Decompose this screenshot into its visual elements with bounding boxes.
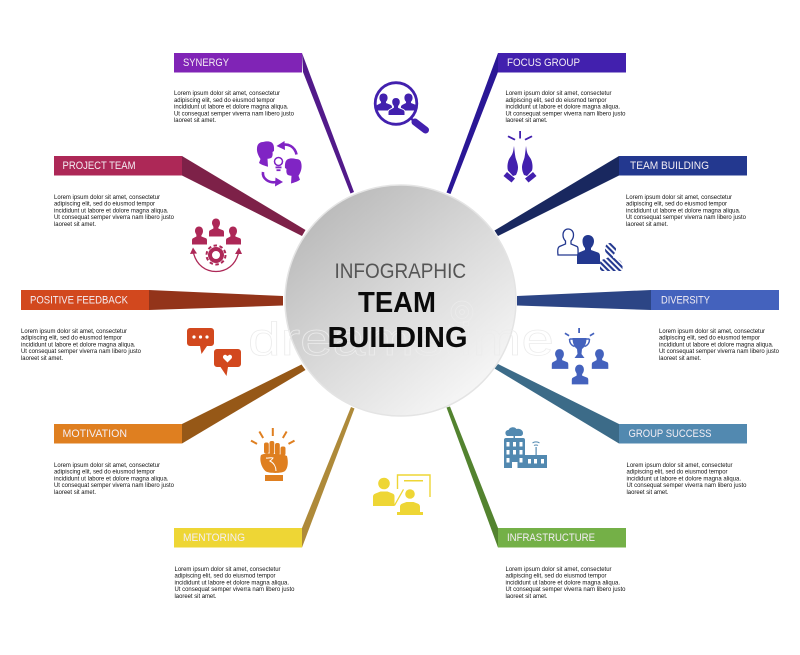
icon: mentor at board	[373, 475, 430, 515]
title: BUILDING	[328, 322, 468, 354]
icon: two heads with idea bulb	[257, 141, 302, 186]
description: Lorem ipsum dolor sit amet, consectetur	[506, 90, 612, 97]
description: Lorem ipsum dolor sit amet, consectetur	[174, 90, 281, 97]
icon: raised fist	[250, 428, 295, 481]
description: laoreet sit amet.	[174, 117, 216, 124]
description: Lorem ipsum dolor sit amet, consectetur	[54, 462, 161, 469]
description: laoreet sit amet.	[54, 489, 96, 496]
description: Ut consequat semper viverra nam libero justo	[506, 110, 626, 117]
description	[21, 328, 141, 362]
label bar	[174, 53, 302, 72]
description: Ut consequat semper viverra nam libero justo	[626, 214, 746, 221]
description: adipiscing elit, sed do eiusmod tempor	[54, 469, 156, 476]
label bar	[54, 156, 182, 176]
description: adipiscing elit, sed do eiusmod tempor	[626, 201, 728, 208]
label bar	[498, 528, 626, 548]
connector	[517, 290, 651, 310]
description: incididunt ut labore et dolore magna aliqua.	[626, 207, 741, 214]
label bar	[619, 424, 747, 444]
connector	[494, 364, 619, 444]
description	[506, 90, 626, 124]
description: Ut consequat semper viverra nam libero justo	[174, 586, 295, 593]
description: laoreet sit amet.	[626, 221, 668, 228]
description	[174, 90, 294, 124]
description: adipiscing elit, sed do eiusmod tempor	[626, 469, 728, 476]
description: Lorem ipsum dolor sit amet, consectetur	[659, 328, 766, 335]
label bar	[21, 290, 149, 310]
label text: MENTORING	[183, 532, 245, 544]
icon: trophy with team	[552, 328, 608, 384]
panel: infrastructure	[446, 406, 626, 600]
connector	[446, 406, 498, 548]
description	[54, 194, 174, 228]
description	[506, 566, 626, 600]
label text: INFRASTRUCTURE	[507, 532, 595, 544]
description: Ut consequat semper viverra nam libero justo	[54, 482, 174, 489]
label bar	[619, 156, 747, 176]
description: incididunt ut labore et dolore magna aliqua.	[174, 104, 289, 110]
label text: MOTIVATION	[62, 428, 127, 440]
label text: GROUP SUCCESS	[628, 428, 712, 440]
label text: FOCUS GROUP	[507, 57, 580, 69]
description: Lorem ipsum dolor sit amet, consectetur	[626, 194, 733, 201]
connector	[446, 53, 498, 194]
panel: project team	[54, 156, 306, 236]
description: Lorem ipsum dolor sit amet, consectetur	[506, 566, 612, 573]
panel: team building	[494, 156, 747, 236]
icon: praying hands	[504, 131, 536, 182]
description: Lorem ipsum dolor sit amet, consectetur	[626, 462, 733, 469]
label text: SYNERGY	[183, 57, 230, 69]
central disc	[285, 185, 516, 416]
description: Lorem ipsum dolor sit amet, consectetur	[21, 328, 128, 335]
icon: team partners	[558, 229, 622, 271]
watermark: dreamstime	[248, 313, 554, 365]
connector	[302, 407, 354, 548]
description: Lorem ipsum dolor sit amet, consectetur	[174, 566, 281, 573]
description: laoreet sit amet.	[626, 489, 669, 496]
panel: diversity	[517, 290, 779, 362]
description: Lorem ipsum dolor sit amet, consectetur	[54, 194, 161, 201]
label text: TEAM BUILDING	[630, 160, 709, 172]
description: adipiscing elit, sed do eiusmod tempor	[174, 573, 276, 580]
description: Ut consequat semper viverra nam libero justo	[659, 348, 779, 355]
panel: focus group	[446, 53, 626, 194]
panel: motivation	[54, 364, 306, 496]
title	[328, 260, 468, 354]
description: incididunt ut labore et dolore magna aliqua.	[21, 341, 136, 348]
description	[54, 462, 174, 496]
title: INFOGRAPHIC	[334, 260, 466, 283]
panel: positive feedback	[21, 290, 283, 362]
label bar	[54, 424, 182, 444]
description: incididunt ut labore et dolore magna aliqua.	[506, 579, 620, 586]
description: incididunt ut labore et dolore magna aliqua.	[54, 207, 169, 214]
description: Ut consequat semper viverra nam libero justo	[626, 482, 747, 489]
description	[659, 328, 779, 362]
description: Ut consequat semper viverra nam libero justo	[174, 110, 294, 117]
description	[626, 462, 747, 496]
description: adipiscing elit, sed do eiusmod tempor	[174, 97, 276, 104]
label bar	[498, 53, 626, 72]
watermark	[248, 301, 554, 365]
description: incididunt ut labore et dolore magna aliqua.	[506, 104, 620, 110]
label text: DIVERSITY	[661, 294, 711, 306]
description: incididunt ut labore et dolore magna aliqua.	[54, 475, 169, 482]
title: TEAM	[358, 287, 436, 319]
description: laoreet sit amet.	[21, 355, 63, 362]
connector	[494, 156, 619, 236]
description: adipiscing elit, sed do eiusmod tempor	[506, 573, 607, 580]
label bar	[174, 528, 302, 548]
description: adipiscing elit, sed do eiusmod tempor	[506, 97, 607, 104]
panel: group success	[494, 364, 747, 496]
panel: synergy	[174, 53, 354, 194]
label text: POSITIVE FEEDBACK	[30, 294, 129, 306]
description: adipiscing elit, sed do eiusmod tempor	[21, 335, 123, 342]
description: Ut consequat semper viverra nam libero justo	[506, 586, 626, 593]
description	[626, 194, 746, 228]
description: incididunt ut labore et dolore magna aliqua.	[659, 341, 774, 348]
description: Ut consequat semper viverra nam libero justo	[21, 348, 141, 355]
description: laoreet sit amet.	[506, 593, 548, 600]
connector	[182, 364, 306, 444]
panel: mentoring	[174, 407, 354, 600]
description: Ut consequat semper viverra nam libero justo	[54, 214, 174, 221]
description: adipiscing elit, sed do eiusmod tempor	[659, 335, 761, 342]
icon: building with cloud	[504, 427, 547, 468]
connector	[302, 53, 354, 194]
label bar	[651, 290, 779, 310]
description: laoreet sit amet.	[506, 117, 548, 124]
icon: speech bubbles	[187, 328, 241, 376]
icon: team with gear	[190, 218, 242, 272]
label text: PROJECT TEAM	[62, 160, 136, 172]
icon: magnifier with people	[375, 83, 426, 130]
connector	[149, 290, 283, 310]
description	[174, 566, 295, 600]
description: adipiscing elit, sed do eiusmod tempor	[54, 201, 156, 208]
description: incididunt ut labore et dolore magna aliqua.	[626, 475, 741, 482]
connector	[182, 156, 306, 236]
description: incididunt ut labore et dolore magna aliqua.	[174, 579, 289, 586]
description: laoreet sit amet.	[659, 355, 701, 362]
description: laoreet sit amet.	[54, 221, 96, 228]
description: laoreet sit amet.	[174, 593, 217, 600]
